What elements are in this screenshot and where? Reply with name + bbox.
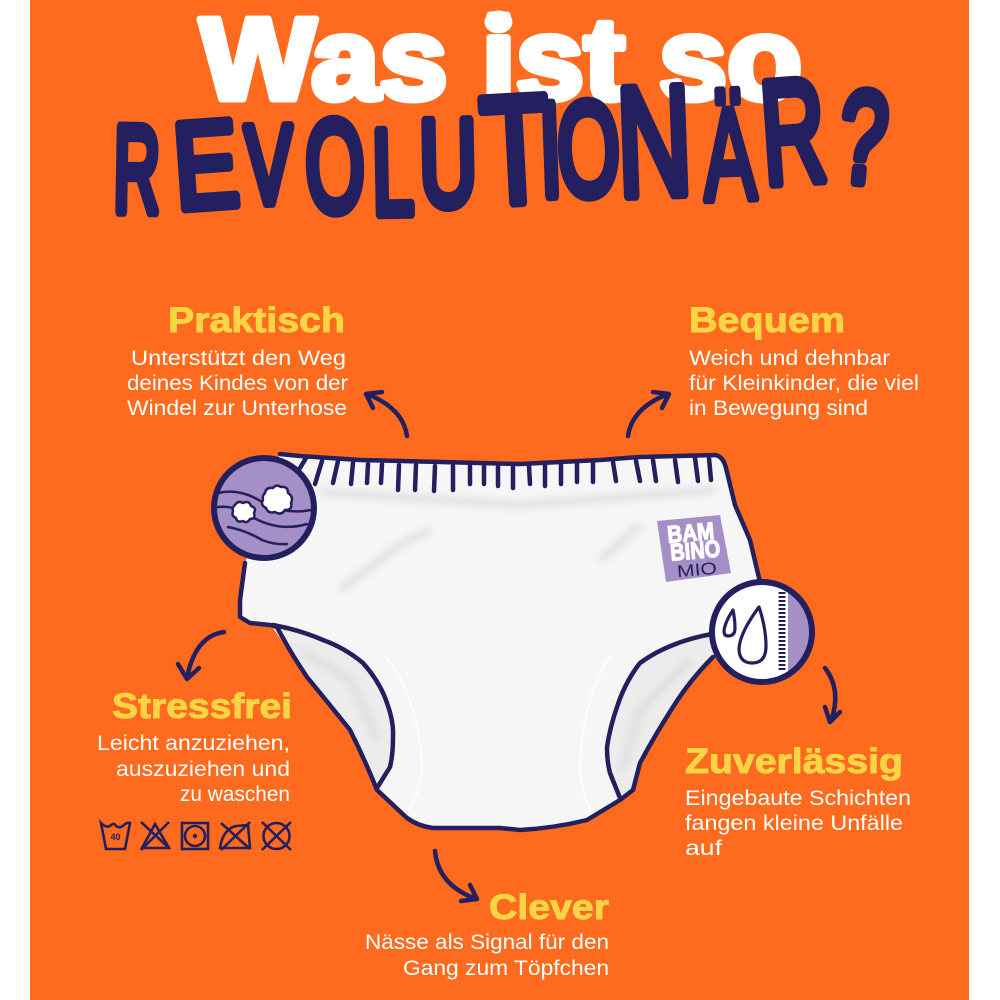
callout: Stressfrei: auszuziehen und xyxy=(116,758,290,781)
icon: tumble dry xyxy=(182,823,208,849)
icon: do not dry clean xyxy=(262,822,291,850)
callout: Clever: Gang zum Töpfchen xyxy=(403,957,609,980)
inner leg right xyxy=(607,635,713,797)
title: hand-lettered REVOLUTIONÄR?: V xyxy=(244,103,293,227)
title: hand-lettered REVOLUTIONÄR?: T xyxy=(477,64,554,237)
callout: Zuverlässig xyxy=(685,742,911,860)
callout: Praktisch xyxy=(127,301,348,420)
icon: soft fabric circle with clouds xyxy=(214,458,314,558)
brand label: Bambino Mio: BINO xyxy=(669,535,721,567)
title: hand-lettered REVOLUTIONÄR?: O xyxy=(303,93,367,240)
callout: Praktisch: Praktisch xyxy=(168,301,345,340)
title: hand-lettered REVOLUTIONÄR?: U xyxy=(418,94,478,232)
title: hand-lettered REVOLUTIONÄR? xyxy=(113,48,893,240)
title: hand-lettered REVOLUTIONÄR?: R xyxy=(113,101,161,238)
icon: wash at 40 degrees xyxy=(101,823,130,849)
callout: Clever: Nässe als Signal für den xyxy=(365,931,609,954)
title: hand-lettered REVOLUTIONÄR?: L xyxy=(371,106,415,240)
icon: wash at 40 degrees: 40 xyxy=(110,832,121,842)
pants body xyxy=(240,453,762,830)
brand label: Bambino Mio xyxy=(657,515,731,582)
callout: Stressfrei: Leicht anzuziehen, xyxy=(97,732,290,755)
callout: Zuverlässig: Eingebaute Schichten xyxy=(685,787,911,810)
leg seams xyxy=(385,655,610,812)
callout: Zuverlässig: Zuverlässig xyxy=(685,742,903,781)
title: hand-lettered REVOLUTIONÄR?: Ä xyxy=(701,81,758,228)
callout: Zuverlässig: auf xyxy=(685,837,722,860)
callout: Bequem: Weich und dehnbar xyxy=(689,347,890,370)
callout: Clever xyxy=(365,888,609,980)
fabric shading xyxy=(300,490,715,770)
brand label: Bambino Mio: MIO xyxy=(676,559,718,581)
title: hand-lettered REVOLUTIONÄR?: R xyxy=(756,48,831,215)
callout: Zuverlässig: fangen kleine Unfälle xyxy=(685,812,903,835)
care symbols row xyxy=(101,822,291,850)
callout: Bequem: Bequem xyxy=(689,301,845,340)
arrow: Zuverlässig xyxy=(825,668,840,722)
callout: Praktisch: Unterstützt den Weg xyxy=(131,347,346,370)
icon: do not bleach xyxy=(141,822,169,850)
callout: Praktisch: deines Kindes von der xyxy=(127,372,348,395)
icon: do not iron xyxy=(220,822,250,850)
arrow: Praktisch xyxy=(366,392,407,436)
title: hand-lettered REVOLUTIONÄR?: N xyxy=(614,53,694,229)
arrow: Stressfrei xyxy=(178,632,224,679)
callout: Bequem: in Bewegung sind xyxy=(689,397,868,420)
pants outline xyxy=(240,454,760,830)
icon: water drops circle xyxy=(712,582,812,682)
brand label: Bambino Mio: BAM xyxy=(666,518,715,549)
inner leg left xyxy=(273,625,393,788)
waistband stitches xyxy=(300,458,711,491)
title: hand-lettered REVOLUTIONÄR?: E xyxy=(169,96,243,236)
callout: Clever: Clever xyxy=(489,888,609,927)
callout: Praktisch: Windel zur Unterhose xyxy=(127,397,347,420)
arrow: Clever xyxy=(435,851,477,901)
arrow: Bequem xyxy=(628,392,669,436)
callout: Stressfrei: zu waschen xyxy=(180,783,290,806)
title: hand-lettered REVOLUTIONÄR?: O xyxy=(555,75,622,225)
callout: Bequem xyxy=(689,301,919,420)
title: hand-lettered REVOLUTIONÄR?: I xyxy=(537,77,564,225)
callout: Bequem: für Kleinkinder, die viel xyxy=(689,372,919,395)
callout: Stressfrei: Stressfrei xyxy=(112,687,292,726)
title: hand-lettered REVOLUTIONÄR?: ? xyxy=(834,64,893,212)
training pants illustration xyxy=(240,453,762,830)
callout: Stressfrei xyxy=(97,687,292,806)
